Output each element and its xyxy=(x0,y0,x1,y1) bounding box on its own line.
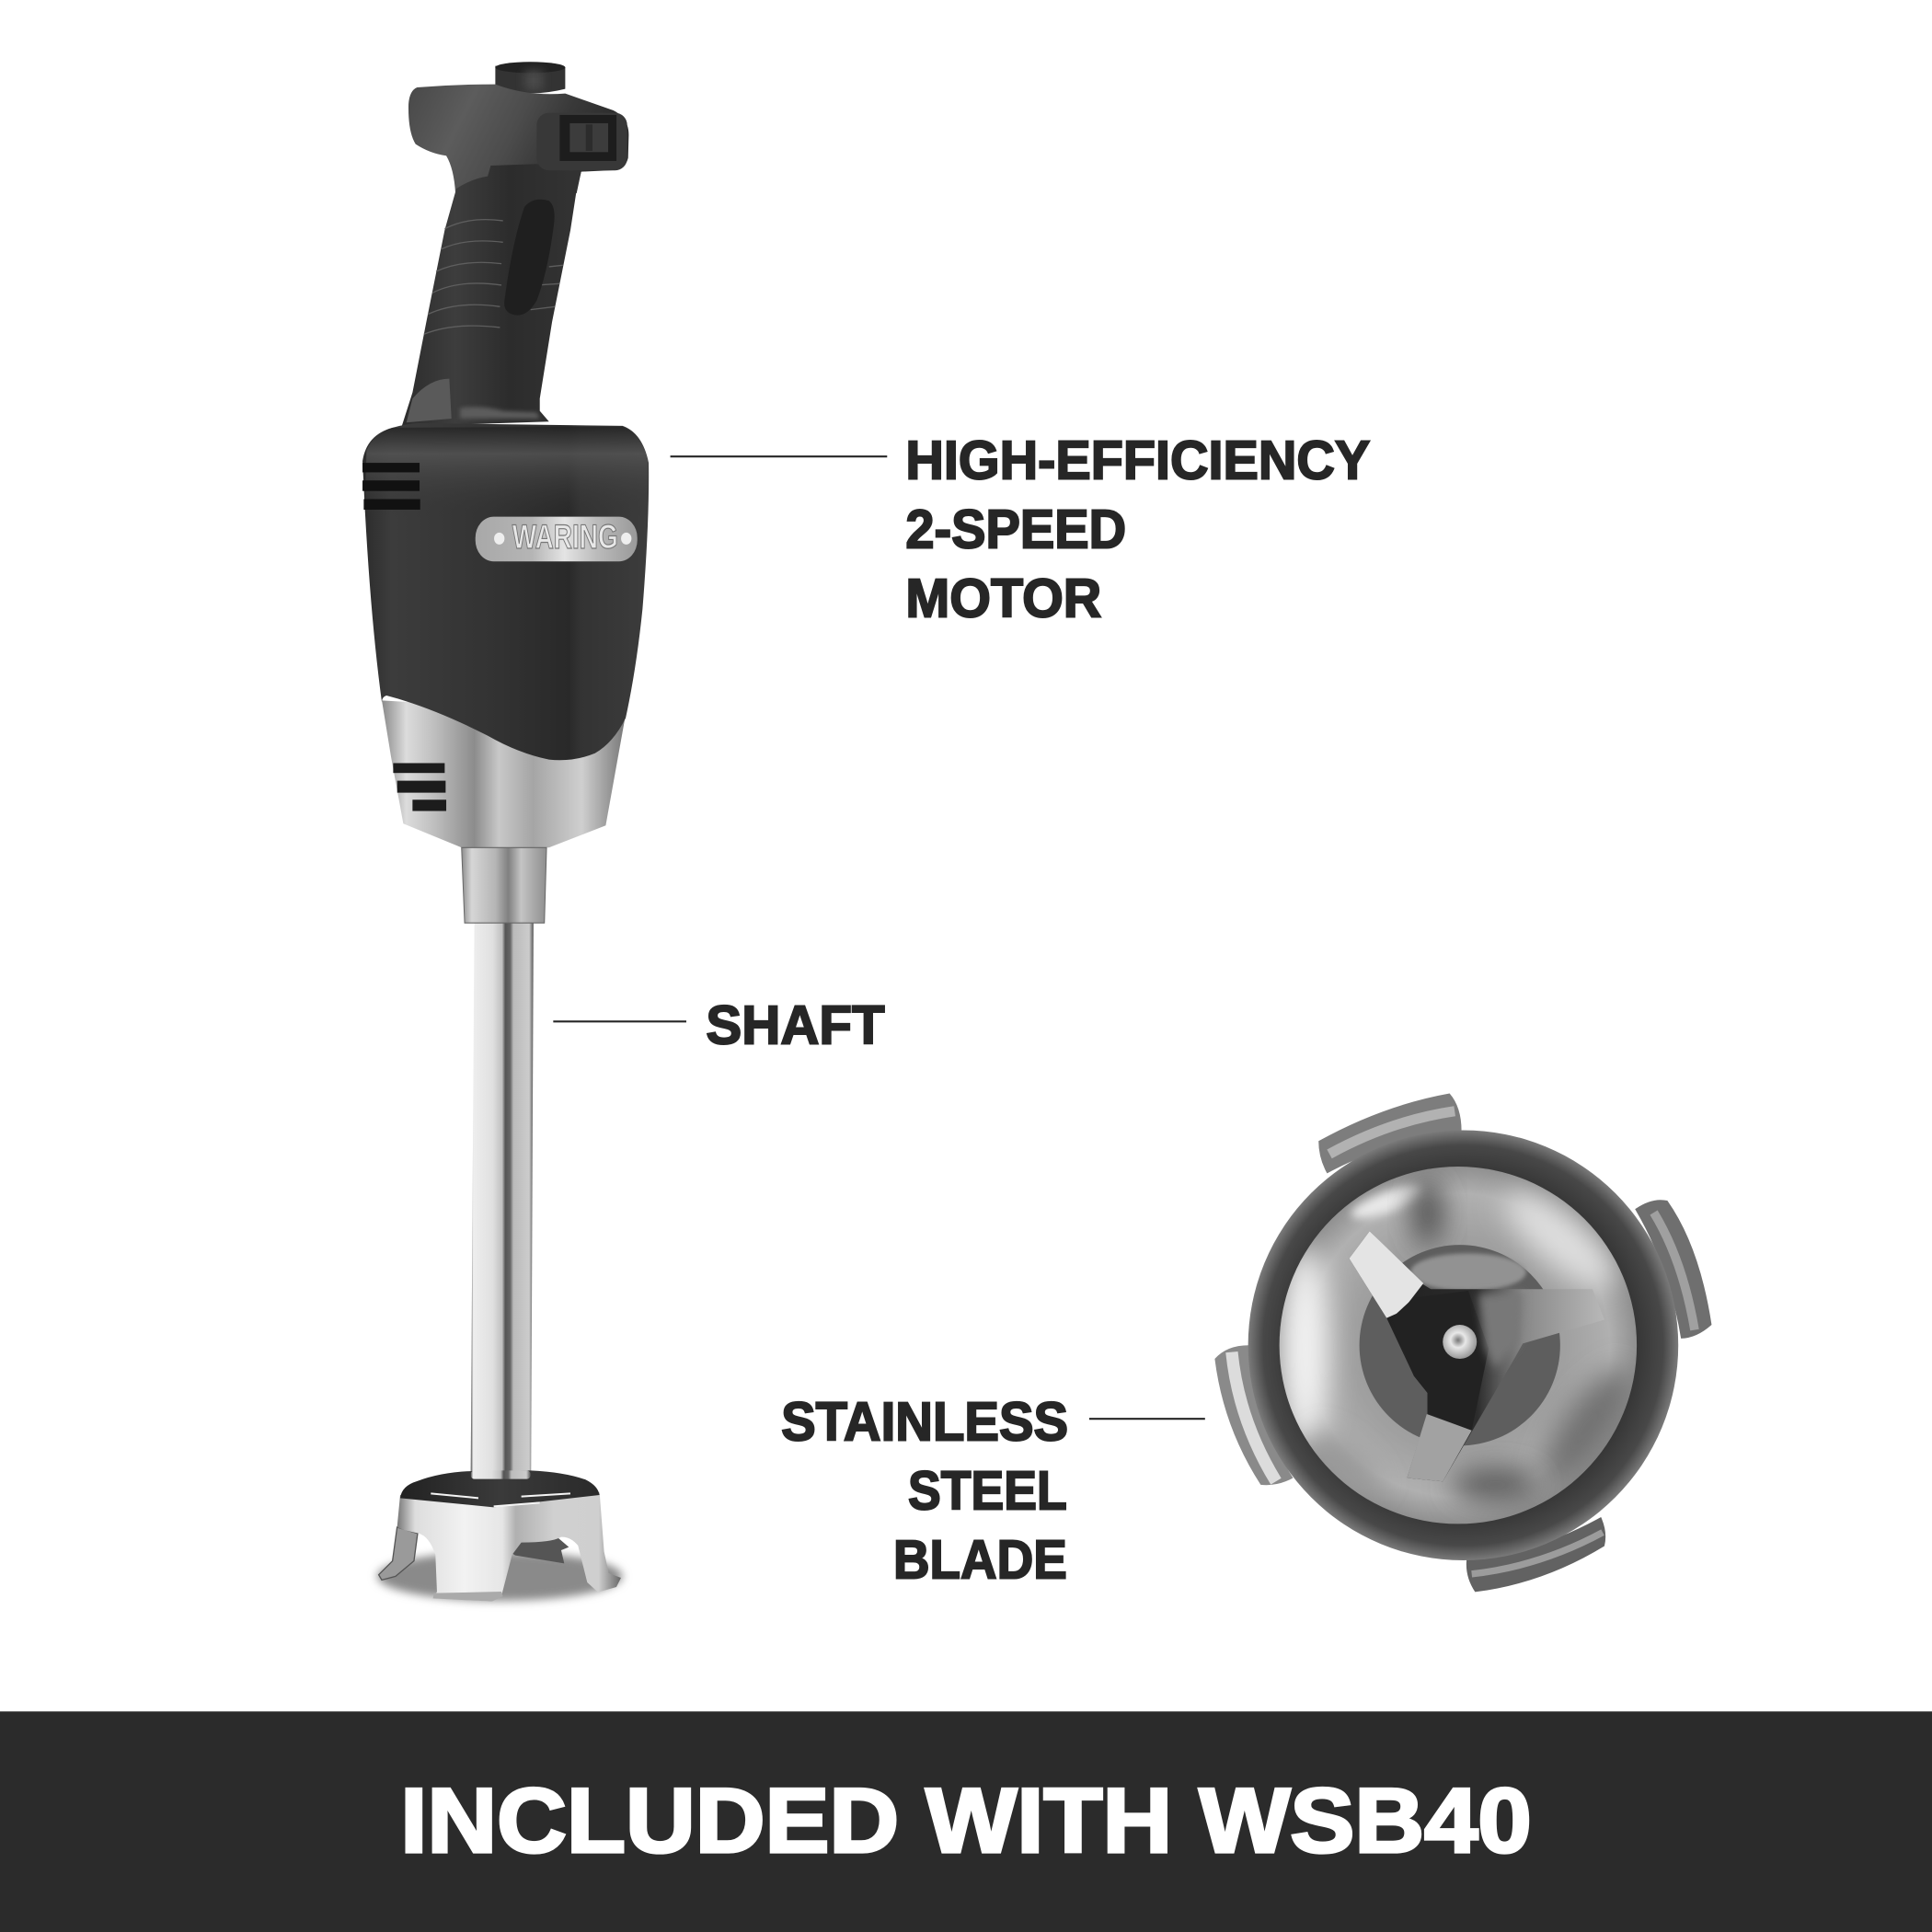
guard legs xyxy=(397,1492,621,1602)
callout label: high-efficiency 2-speed motor xyxy=(905,431,1370,628)
blender handle xyxy=(402,62,628,426)
neck highlight xyxy=(460,407,540,419)
three-arm blade xyxy=(1350,1231,1604,1481)
mounting tabs xyxy=(1214,1093,1711,1592)
Waring badge: WARING xyxy=(512,519,618,557)
shaft xyxy=(471,919,534,1481)
callout label: high-efficiency 2-speed motor: MOTOR xyxy=(905,569,1101,628)
blade left arm xyxy=(1350,1231,1423,1318)
callout line: blade xyxy=(1089,1418,1205,1420)
grip wedge xyxy=(407,379,452,422)
callout label: stainless steel blade: STEEL xyxy=(908,1462,1067,1522)
blade bottom arm xyxy=(1407,1414,1472,1481)
callout label: stainless steel blade xyxy=(781,1393,1068,1591)
collar xyxy=(462,847,546,923)
guard highlights xyxy=(431,1493,570,1506)
top button xyxy=(495,62,565,93)
blade texture xyxy=(1478,1293,1523,1369)
grip ribs xyxy=(424,220,563,334)
callout label: high-efficiency 2-speed motor: HIGH-EFFICIENCY xyxy=(905,431,1370,490)
bowl lighting xyxy=(1282,1178,1646,1510)
upper vents xyxy=(362,463,420,510)
motor housing xyxy=(362,423,649,923)
blade close-up illustration xyxy=(1214,1093,1711,1592)
inner blade xyxy=(512,1538,569,1563)
cup rim and inner wall xyxy=(1248,1130,1678,1560)
callout label: shaft: SHAFT xyxy=(706,995,885,1055)
guard dome xyxy=(400,1470,600,1507)
blade hub xyxy=(1360,1245,1560,1445)
rivet xyxy=(1443,1325,1477,1359)
floor shadow xyxy=(377,1552,623,1601)
rocker switch xyxy=(536,113,627,170)
blade centre xyxy=(1392,1291,1489,1431)
callout line: shaft xyxy=(553,1020,686,1022)
banner xyxy=(0,1711,1932,1932)
hub highlight xyxy=(1410,1253,1526,1291)
callout label: high-efficiency 2-speed motor: 2-SPEED xyxy=(905,500,1126,559)
foot base xyxy=(433,1592,503,1602)
grip lower xyxy=(402,164,581,426)
immersion blender product illustration xyxy=(362,62,649,1602)
callout line: motor xyxy=(671,455,887,457)
black upper housing xyxy=(362,423,649,760)
grip side pill xyxy=(504,200,555,316)
callout label: stainless steel blade: BLADE xyxy=(893,1531,1067,1591)
blade guard foot xyxy=(377,1470,623,1602)
grip upper head xyxy=(408,85,628,193)
housing top sheen xyxy=(365,427,648,517)
lower vents xyxy=(393,763,446,811)
back left leg xyxy=(379,1527,418,1580)
banner heading: INCLUDED WITH WSB40 xyxy=(400,1770,1532,1872)
callout label: stainless steel blade: STAINLESS xyxy=(781,1393,1068,1453)
brushed bowl xyxy=(1280,1167,1637,1524)
Waring badge xyxy=(476,517,638,561)
steel lower housing xyxy=(382,700,626,847)
shaft base xyxy=(471,1470,531,1479)
